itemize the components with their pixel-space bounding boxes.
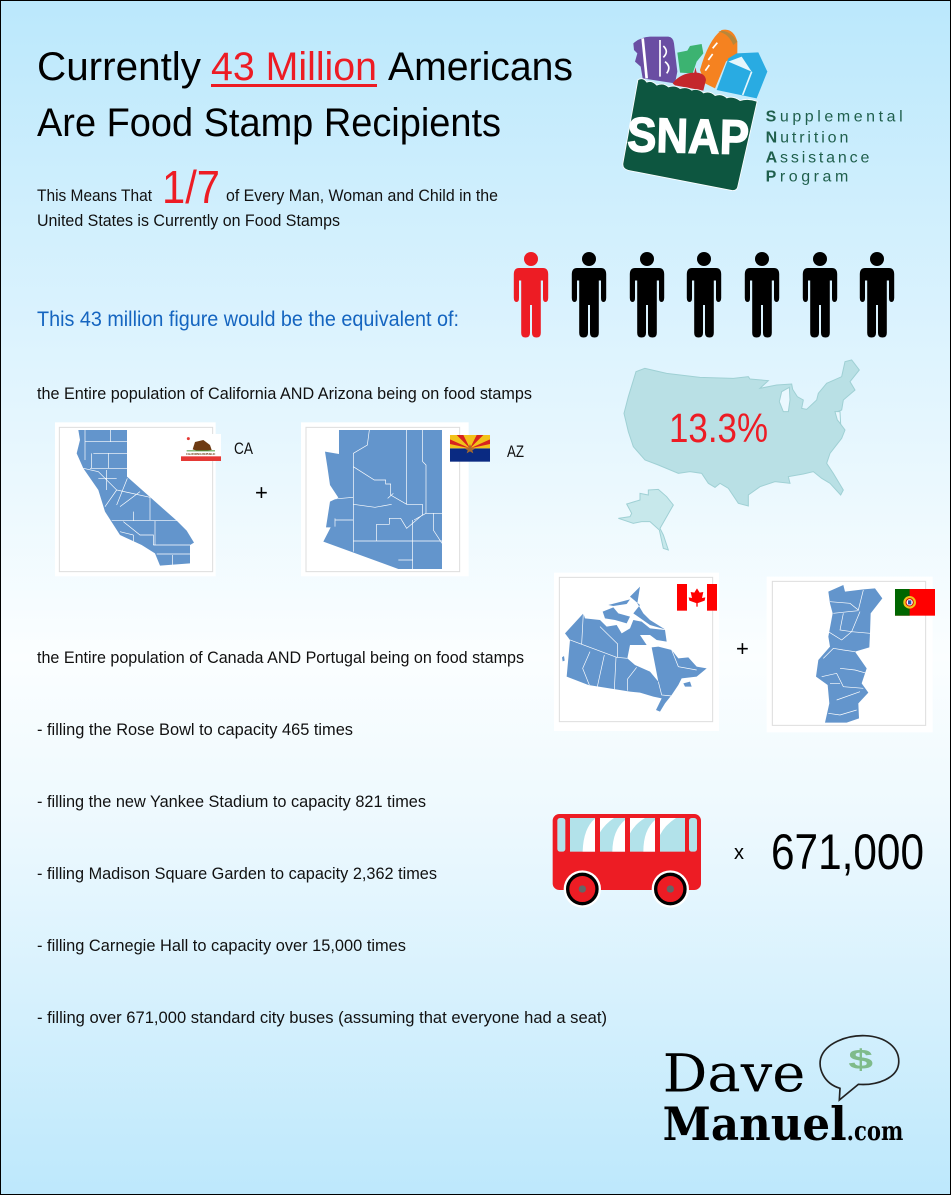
panel: Arizona map (301, 422, 490, 576)
icon: speech bubble (820, 1036, 899, 1100)
icon: red bus (553, 814, 701, 908)
plus sign: + (736, 636, 749, 661)
logo: Dave Manuel: Manuel (663, 1097, 847, 1151)
flag: Canada (677, 584, 717, 611)
text: Canada and Portugal: the Entire population of Canada AND Portugal being on food stamps (37, 648, 524, 667)
wheels (564, 870, 689, 908)
number: buses: 671,000 (771, 824, 924, 880)
flag: Portugal (895, 589, 935, 616)
SNAP logo (623, 30, 903, 190)
list: capacity comparisons (37, 720, 607, 1027)
panel: Portugal map (767, 577, 935, 732)
SNAP logo: SNAP (627, 108, 750, 165)
grocery bag (623, 79, 757, 190)
plus sign: + (255, 480, 268, 505)
label: AZ: AZ (507, 442, 524, 461)
map: United States 13.3% (618, 360, 859, 550)
icon: bread (633, 37, 677, 83)
program name (766, 109, 903, 186)
panel: Canada map (554, 573, 719, 731)
program name: Assistance (766, 149, 869, 166)
text block: one seventh statement: 1/7 (162, 161, 220, 213)
heading: equivalent: This 43 million figure would be the equivalent of: (37, 308, 459, 331)
program name: Program (766, 169, 848, 186)
title: Americans (388, 45, 573, 89)
text block: one seventh statement: This Means That (37, 186, 152, 205)
icon: baguette (700, 30, 737, 88)
map: United States 13.3%: 13.3% (669, 405, 768, 451)
list: capacity comparisons: - filling Carnegie Hall to capacity over 15,000 times (37, 936, 406, 955)
logo: Dave Manuel (663, 1036, 903, 1151)
label: CA: CA (234, 439, 254, 458)
dollar sign: $ (848, 1044, 874, 1075)
title: 43 Million (211, 45, 377, 89)
program name: Supplemental (766, 109, 903, 126)
icon: milk carton (717, 52, 767, 98)
title: Are Food Stamp Recipients (37, 101, 501, 145)
flag: Arizona (450, 435, 490, 462)
text: California and Arizona: the Entire population of California AND Arizona being on food stamps (37, 384, 532, 403)
text block: one seventh statement (37, 161, 498, 230)
flag: California: CALIFORNIA REPUBLIC (186, 452, 216, 456)
logo: Dave Manuel: Dave (663, 1044, 805, 1105)
icon: apple (673, 67, 706, 91)
panel: California map (55, 422, 221, 576)
title: Currently (37, 45, 201, 89)
pictogram: one of seven people (514, 252, 894, 338)
text block: one seventh statement: United States is Currently on Food Stamps (37, 211, 340, 230)
logo: Dave Manuel: .com (847, 1117, 903, 1147)
flag: California (181, 434, 221, 461)
program name: Nutrition (766, 129, 848, 146)
list: capacity comparisons: - filling Madison Square Garden to capacity 2,362 times (37, 864, 437, 883)
multiplier: x (734, 842, 744, 864)
list: capacity comparisons: - filling over 671,000 standard city buses (assuming that everyone had a seat) (37, 1008, 607, 1027)
text block: one seventh statement: of Every Man, Woman and Child in the (226, 186, 498, 205)
title (37, 45, 573, 145)
list: capacity comparisons: - filling the new Yankee Stadium to capacity 821 times (37, 792, 426, 811)
list: capacity comparisons: - filling the Rose Bowl to capacity 465 times (37, 720, 353, 739)
icon: greens (677, 44, 703, 73)
